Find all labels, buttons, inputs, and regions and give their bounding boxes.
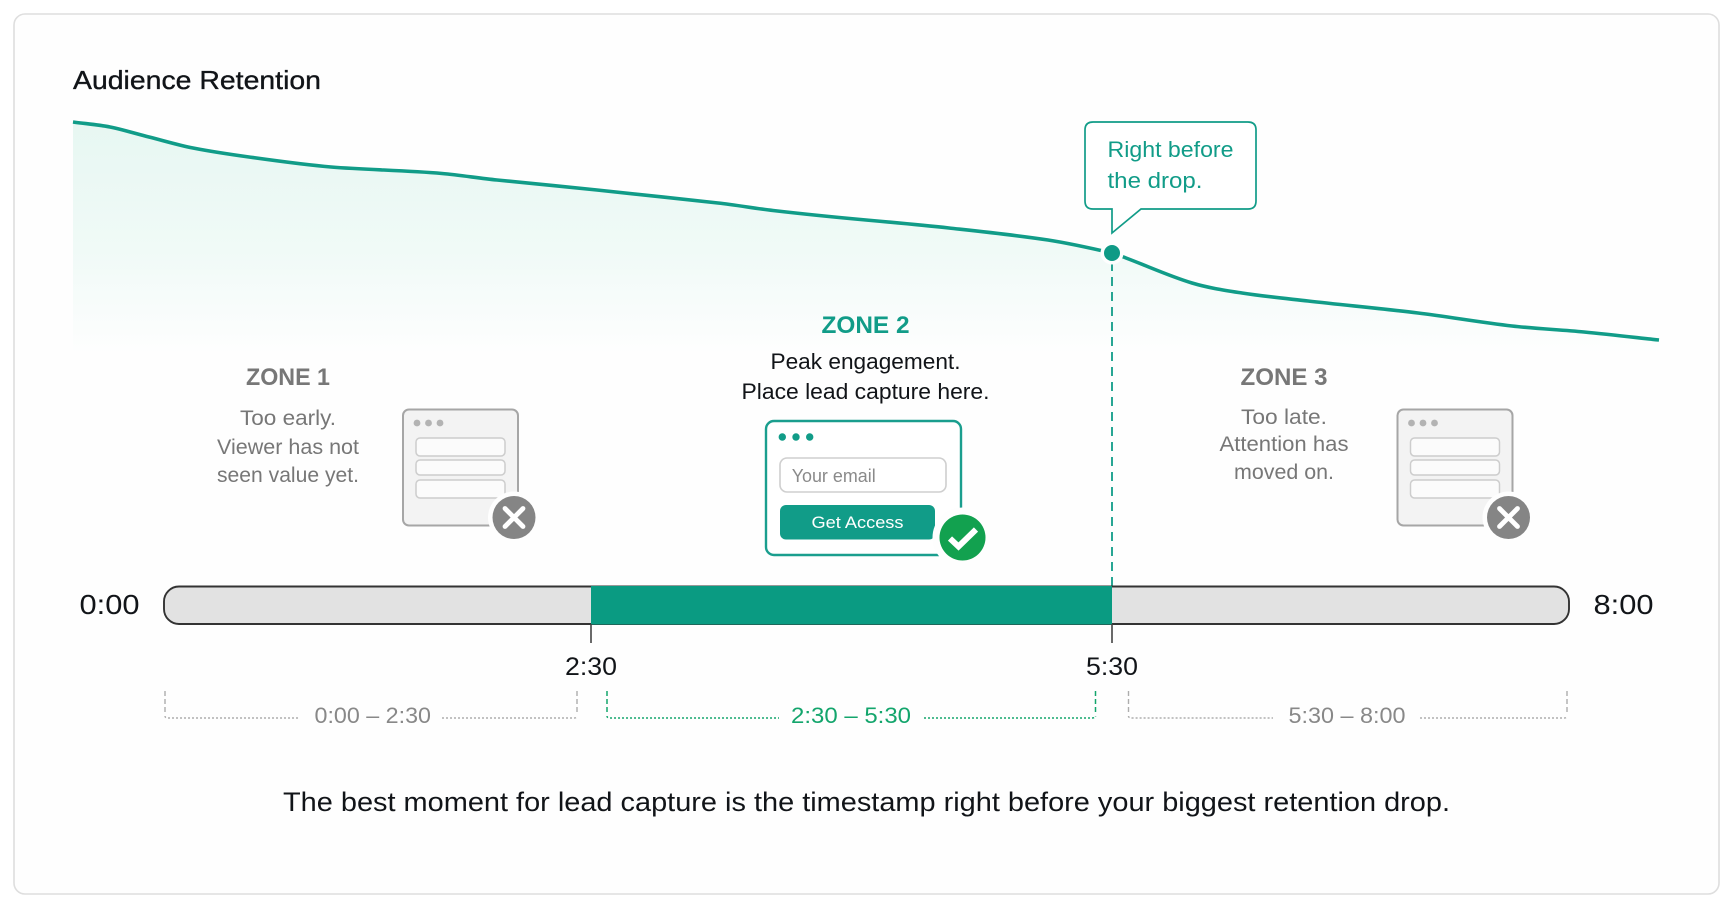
- zone 3 text: Too late.: [1241, 406, 1327, 429]
- icon: lead capture form, zone 2: Your email: [792, 466, 876, 486]
- range bracket: 0:00 to 2:30: 0:00 – 2:30: [314, 703, 431, 728]
- zone 3 text: Attention has: [1220, 433, 1348, 456]
- zone 1 text: [217, 364, 359, 487]
- 5:30 dashed marker line: [1111, 262, 1113, 586]
- icon: rejected form, zone 3: [1398, 410, 1534, 544]
- title: Audience Retention: [73, 65, 321, 95]
- callout: right before the drop: [1085, 122, 1256, 233]
- zone 2 text: ZONE 2: [822, 312, 910, 339]
- callout: right before the drop: Right before: [1108, 137, 1234, 162]
- zone 1 text: Too early.: [240, 407, 336, 430]
- zone 2 text: Peak engagement.: [770, 349, 960, 374]
- end time label: 8:00: [1594, 589, 1654, 620]
- icon: rejected form, zone 1: [403, 410, 540, 544]
- range bracket: 2:30 to 5:30: 2:30 – 5:30: [791, 703, 911, 728]
- retention curve: [73, 122, 1659, 340]
- timeline bar: [164, 586, 1569, 643]
- zone 2 text: [742, 312, 990, 404]
- retention area fill: [73, 122, 1659, 355]
- start time label: 0:00: [80, 589, 140, 620]
- drop point marker: [1100, 242, 1124, 264]
- zone 1 text: ZONE 1: [246, 364, 330, 391]
- zone 3 text: moved on.: [1234, 461, 1334, 484]
- callout: right before the drop: the drop.: [1108, 168, 1202, 193]
- icon: lead capture form, zone 2: Get Access: [812, 513, 904, 532]
- zone 2 text: Place lead capture here.: [742, 379, 990, 404]
- 5:30 tick label: 5:30: [1086, 653, 1138, 681]
- zone 3 text: [1220, 364, 1348, 484]
- range bracket: 5:30 to 8:00: 5:30 – 8:00: [1288, 703, 1406, 728]
- takeaway sentence: The best moment for lead capture is the timestamp right before your biggest retention drop.: [283, 787, 1450, 817]
- zone 1 text: Viewer has not: [217, 436, 359, 459]
- retention chart: [73, 122, 1659, 586]
- zone 3 text: ZONE 3: [1240, 364, 1328, 391]
- zone 1 text: seen value yet.: [217, 464, 359, 487]
- icon: lead capture form, zone 2: [766, 421, 992, 568]
- 2:30 tick label: 2:30: [565, 653, 617, 681]
